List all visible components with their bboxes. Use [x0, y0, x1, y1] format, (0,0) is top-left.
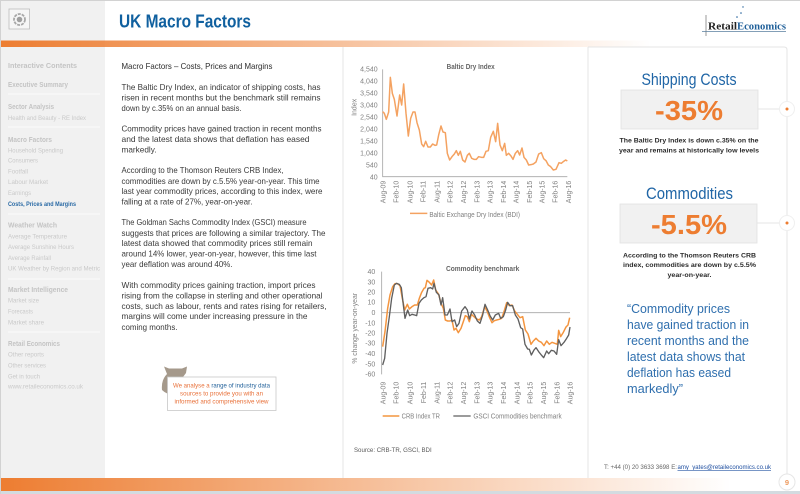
- line chart: Baltic Dry Index: Feb-16: [553, 181, 560, 203]
- paragraph: CRB index: last year commodity prices, according to this index, were: [122, 186, 323, 196]
- paragraph: commodity prices: markedly.: [122, 144, 156, 154]
- stat panel: shipping costs: -35%: [655, 95, 723, 126]
- paragraph: Baltic Dry Index: [122, 82, 320, 113]
- stat panel: commodities: -5.5%: [651, 209, 727, 240]
- panel: sidebar navigation: Household Spending: [8, 148, 63, 154]
- logo: Retail Economics: Economics: [737, 22, 786, 32]
- line chart: Commodity benchmark: Aug-16: [568, 382, 575, 404]
- panel: sidebar navigation: Weather Watch: [8, 220, 57, 230]
- line chart: Baltic Dry Index: 2,040: [360, 126, 378, 133]
- callout: owl with data note: sources to provide you with an: [180, 392, 263, 398]
- paragraph: GSCI: year deflation was around 40%.: [122, 259, 232, 269]
- panel: sidebar navigation: Health and Beauty - RE Index: [8, 115, 87, 122]
- line chart: Baltic Dry Index: Aug-13: [488, 181, 495, 203]
- paragraph: outlook: costs, such as labour, rents and rates rising for retailers,: [122, 301, 326, 311]
- icon: owl: [162, 366, 200, 395]
- panel: sidebar navigation: Get in touch: [8, 374, 40, 380]
- line chart: Commodity benchmark: % change year-on-year: [352, 292, 359, 364]
- line chart: Commodity benchmark: -50: [365, 361, 375, 368]
- line chart: Baltic Dry Index: Aug-12: [461, 181, 468, 203]
- line chart: Baltic Dry Index: Feb-11: [421, 181, 428, 202]
- callout: owl with data note: We analyse a range of industry data: [173, 384, 271, 390]
- panel: sidebar navigation: Average Temperature: [8, 234, 67, 240]
- orange header bar: [1, 40, 651, 47]
- paragraph: Baltic Dry Index: risen in recent months but the benchmark still remains: [122, 92, 320, 102]
- line chart: Commodity benchmark: Aug-11: [434, 382, 441, 404]
- line chart: Commodity benchmark: Aug-13: [488, 382, 495, 404]
- line chart: Baltic Dry Index: 1,040: [360, 150, 378, 157]
- line chart: Baltic Dry Index: Feb-13: [474, 181, 481, 203]
- panel: sidebar navigation: Average Rainfall: [8, 255, 51, 262]
- panel: sidebar navigation: UK Weather by Region and Metric: [8, 266, 101, 272]
- line chart: Baltic Dry Index: 4,540: [360, 67, 378, 74]
- panel: sidebar navigation: Consumers: [8, 158, 38, 164]
- paragraph: outlook: margins will come under increasing pressure in the: [122, 311, 308, 321]
- line chart: Baltic Dry Index: 2,540: [360, 114, 378, 121]
- line chart: Commodity benchmark: Aug-09: [380, 382, 387, 404]
- stat panel: shipping costs: The Baltic Dry Index is down c.35% on the: [620, 138, 759, 144]
- paragraph: outlook: coming months.: [122, 322, 178, 332]
- line chart: Baltic Dry Index: Baltic Exchange Dry Index (BDI): [429, 212, 520, 219]
- line chart: Commodity benchmark: -60: [365, 372, 375, 379]
- line chart: Commodity benchmark: Source: CRB-TR, GSCI, BDI: [354, 447, 432, 454]
- panel: sidebar navigation: www.retaileconomics.co.uk: [7, 384, 84, 390]
- line chart: Commodity benchmark: Aug-14: [514, 382, 521, 404]
- line chart: Commodity benchmark: Feb-11: [421, 382, 428, 403]
- line chart: Baltic Dry Index: Aug-16: [566, 181, 573, 203]
- panel: sidebar navigation: Retail Economics: [8, 339, 60, 348]
- stat panel: shipping costs: [619, 70, 794, 154]
- paragraph: CRB index: commodities are down by c.5.5% year-on-year. This time: [122, 176, 320, 186]
- line chart: Baltic Dry Index: Feb-15: [527, 181, 534, 203]
- line chart: Commodity benchmark: CRB Index TR: [402, 414, 440, 421]
- stat panel: commodities: year-on-year.: [668, 272, 712, 279]
- pull quote: “Commodity prices: [627, 301, 730, 316]
- line chart: Baltic Dry Index: 1,540: [360, 138, 378, 145]
- line chart: Commodity benchmark: Feb-10: [394, 382, 401, 404]
- line chart: Commodity benchmark: -20: [365, 331, 375, 338]
- panel: sidebar navigation: [1, 1, 105, 478]
- paragraph: commodity prices: and the latest data shows that deflation has eased: [122, 134, 310, 144]
- line chart: Baltic Dry Index: Feb-10: [394, 181, 401, 203]
- line chart: Baltic Dry Index: 540: [366, 162, 378, 169]
- line chart: Commodity benchmark: Feb-14: [501, 382, 508, 404]
- paragraph: commodity prices: Commodity prices have gained traction in recent months: [122, 124, 322, 134]
- panel: sidebar navigation: Market Intelligence: [8, 285, 68, 294]
- line chart: Baltic Dry Index: [352, 64, 573, 219]
- contact details: T: +44 (0) 20 3633 3698 E:: [604, 465, 677, 471]
- panel: sidebar navigation: Market size: [8, 298, 39, 304]
- pull quote: have gained traction in: [627, 317, 749, 332]
- pull quote: markedly”: [627, 381, 683, 396]
- panel: sidebar navigation: Costs, Prices and Margins: [8, 201, 76, 208]
- panel: sidebar navigation: Market share: [8, 320, 44, 326]
- paragraph: CRB index: [122, 165, 323, 206]
- page number: 9: [785, 478, 789, 487]
- line chart: Commodity benchmark: Feb-12: [448, 382, 455, 404]
- paragraph: GSCI: suggests that prices are following a similar trajectory. The: [122, 228, 326, 238]
- contact details: amy_yates@retaileconomics.co.uk: [678, 465, 772, 471]
- paragraph: Baltic Dry Index: The Baltic Dry Index, an indicator of shipping costs, has: [122, 82, 320, 92]
- orange footer bar: [1, 478, 731, 491]
- line chart: Commodity benchmark: [352, 266, 575, 454]
- line chart: Commodity benchmark: Feb-13: [474, 382, 481, 404]
- pull quote: deflation has eased: [627, 365, 731, 380]
- paragraph: GSCI: The Goldman Sachs Commodity Index (GSCI) measure: [122, 217, 307, 227]
- line chart: Commodity benchmark: -10: [365, 320, 375, 327]
- line chart: Commodity benchmark: -40: [365, 351, 375, 358]
- title: UK Macro Factors: [119, 12, 251, 32]
- panel: sidebar navigation: Earnings: [8, 190, 31, 197]
- line chart: Commodity benchmark: 40: [368, 269, 375, 276]
- line chart: Commodity benchmark: 0: [371, 310, 375, 317]
- line chart: Commodity benchmark: 30: [368, 279, 375, 286]
- pull quote: latest data shows that: [627, 349, 745, 364]
- line chart: Commodity benchmark: 20: [368, 290, 375, 297]
- panel: sidebar navigation: Other reports: [8, 352, 44, 358]
- line chart: Commodity benchmark: Aug-15: [541, 382, 548, 404]
- line chart: Commodity benchmark: Commodity benchmark: [446, 266, 519, 273]
- paragraph: CRB index: According to the Thomson Reuters CRB Index,: [122, 165, 284, 175]
- panel: sidebar navigation: Other services: [8, 362, 46, 370]
- paragraph: GSCI: latest data showed that commodity prices still remain: [122, 238, 313, 248]
- line chart: Baltic Dry Index: Aug-11: [434, 181, 441, 203]
- logo: Retail Economics: [702, 6, 786, 36]
- paragraph: GSCI: [122, 217, 326, 269]
- stat panel: shipping costs: year and remains at historically low levels: [619, 148, 759, 154]
- line chart: Baltic Dry Index: Index: [352, 98, 359, 116]
- stat panel: commodities: [620, 184, 794, 279]
- line chart: Baltic Dry Index: Aug-10: [407, 181, 414, 203]
- paragraph: Baltic Dry Index: down by c.35% on an annual basis.: [122, 103, 242, 113]
- line chart: Commodity benchmark: Feb-15: [528, 382, 535, 404]
- line chart: Commodity benchmark: Aug-10: [407, 382, 414, 404]
- line chart: Commodity benchmark: 10: [368, 300, 375, 307]
- panel: sidebar navigation: Forecasts: [8, 308, 33, 316]
- line chart: Commodity benchmark: GSCI Commodities benchmark: [473, 414, 562, 421]
- pull quote: [627, 301, 749, 396]
- paragraph: CRB index: falling at a rate of 27%, year-on-year.: [122, 196, 252, 206]
- line chart: Baltic Dry Index: 3,540: [360, 91, 378, 98]
- column dividers and right panel frame: [343, 47, 787, 478]
- callout: owl with data note: informed and comprehensive view: [174, 400, 269, 406]
- line chart: Commodity benchmark: Feb-16: [554, 382, 561, 404]
- line chart: Baltic Dry Index: Aug-15: [540, 181, 547, 203]
- panel: sidebar navigation: Interactive Contents: [8, 61, 77, 70]
- panel: sidebar navigation: Executive Summary: [8, 80, 69, 89]
- paragraph: commodity prices: [122, 124, 322, 154]
- paragraph: GSCI: around 14% lower, year-on-year, however, this time last: [122, 249, 317, 259]
- stat panel: commodities: According to the Thomson Reuters CRB: [623, 252, 756, 260]
- paragraph: outlook: rising from the collapse in sterling and other operational: [122, 290, 323, 300]
- panel: article text: [122, 61, 326, 332]
- stat panel: commodities: Commodities: [646, 184, 733, 203]
- contact details: [604, 465, 772, 471]
- pull quote: recent months and the: [627, 333, 749, 348]
- article heading: Macro Factors – Costs, Prices and Margins: [122, 61, 272, 71]
- panel: sidebar navigation: Sector Analysis: [8, 102, 54, 111]
- line chart: Baltic Dry Index: Feb-12: [448, 181, 455, 203]
- callout: owl with data note: [162, 366, 276, 410]
- panel: sidebar navigation: Footfall: [8, 168, 28, 176]
- line chart: Commodity benchmark: Aug-12: [461, 382, 468, 404]
- line chart: Baltic Dry Index: Aug-09: [380, 181, 387, 203]
- line chart: Baltic Dry Index: 40: [370, 174, 378, 181]
- line chart: Baltic Dry Index: Feb-14: [501, 181, 508, 203]
- line chart: Baltic Dry Index: Aug-14: [514, 181, 521, 203]
- paragraph: outlook: [122, 280, 326, 332]
- panel: sidebar navigation: Average Sunshine Hours: [8, 244, 74, 251]
- paragraph: outlook: With commodity prices gaining traction, import prices: [122, 280, 316, 290]
- line chart: Baltic Dry Index: 4,040: [360, 79, 378, 86]
- logo: Retail Economics: Retail: [708, 22, 737, 32]
- line chart: Baltic Dry Index: 3,040: [360, 103, 378, 110]
- line chart: Commodity benchmark: -30: [365, 341, 375, 348]
- stat panel: commodities: index, commodities are down by c.5.5%: [623, 262, 756, 269]
- panel: sidebar navigation: Macro Factors: [8, 135, 52, 144]
- panel: sidebar navigation: Labour Market: [8, 179, 48, 186]
- line chart: Baltic Dry Index: Baltic Dry Index: [447, 64, 495, 71]
- stat panel: shipping costs: Shipping Costs: [642, 70, 736, 89]
- page number: [779, 474, 795, 490]
- icon: settings gear: [9, 9, 30, 29]
